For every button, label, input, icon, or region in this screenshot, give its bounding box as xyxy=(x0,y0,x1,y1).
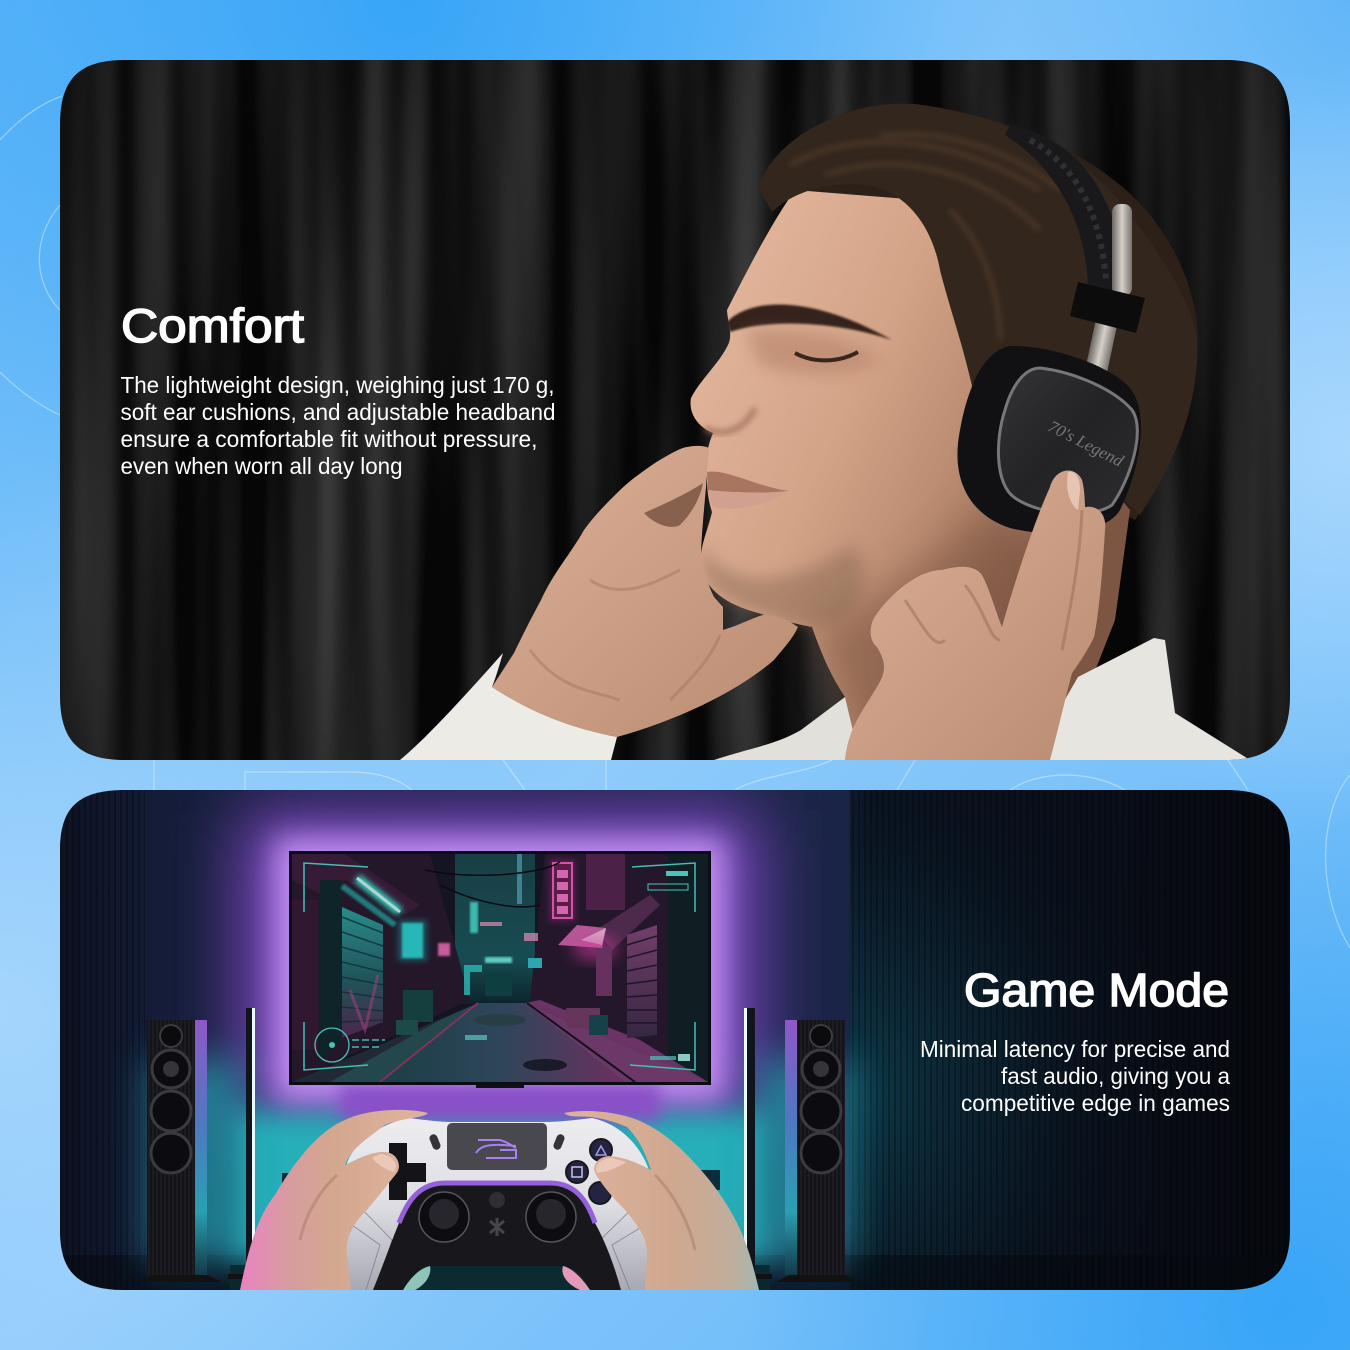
hinge block xyxy=(1070,282,1145,333)
teal neon tube xyxy=(357,878,400,912)
controller dark center xyxy=(373,1183,621,1290)
slider arm xyxy=(1112,204,1132,296)
heading: Game Mode: Game Mode xyxy=(964,964,1229,1016)
barrel xyxy=(589,1015,608,1035)
hair front xyxy=(758,104,1197,515)
left shirt cuff xyxy=(400,653,617,760)
eye socket shadow xyxy=(745,329,880,374)
pink awning xyxy=(558,925,606,948)
right speaker xyxy=(775,1020,860,1282)
face buttons xyxy=(566,1139,612,1204)
room wall xyxy=(60,790,1290,1290)
headband xyxy=(1005,126,1112,290)
right light bar xyxy=(738,1008,772,1279)
pink neon vertical sign xyxy=(553,863,572,918)
left shutter xyxy=(342,907,383,1038)
overhead wires xyxy=(425,862,560,907)
text block: game mode description: competitive edge in games xyxy=(961,1090,1230,1116)
hair back xyxy=(808,104,1198,520)
left shirt collar xyxy=(714,697,860,760)
left hand on controller xyxy=(240,1110,428,1290)
right hand on controller xyxy=(564,1111,759,1290)
HUD xyxy=(304,863,695,1070)
text block: game mode description: Minimal latency for precise and xyxy=(920,1036,1230,1062)
bottom opening with fingers xyxy=(405,1266,590,1290)
eyebrow xyxy=(727,304,892,340)
face and neck xyxy=(691,190,1130,760)
game controller xyxy=(341,1118,660,1290)
dark curtain background xyxy=(60,60,1290,760)
left speaker xyxy=(137,1020,222,1282)
screen dimming xyxy=(292,854,708,1082)
text block: game mode description xyxy=(920,1036,1230,1116)
green dumpster xyxy=(403,990,433,1022)
teal sign xyxy=(402,923,423,958)
text block: game mode description: fast audio, giving you a xyxy=(1001,1063,1230,1089)
sky gap xyxy=(455,854,535,1004)
shoulder menu buttons xyxy=(428,1133,442,1151)
small pink sign xyxy=(438,943,450,956)
ambient purple and teal glow xyxy=(150,810,850,1290)
glowing purple arc xyxy=(399,1183,595,1223)
text block: comfort description: The lightweight design, weighing just 170 g, xyxy=(120,372,554,398)
closed eye xyxy=(795,352,858,360)
panel: game mode xyxy=(60,790,1290,1290)
text block: comfort description: soft ear cushions, and adjustable headband xyxy=(120,399,556,425)
left light bar xyxy=(228,1008,262,1279)
end of alley door xyxy=(485,972,512,996)
d-pad xyxy=(380,1143,426,1200)
small signs xyxy=(485,957,512,963)
stubble shadow xyxy=(702,540,864,627)
heading: Comfort: Comfort xyxy=(121,299,304,352)
lips xyxy=(707,471,790,493)
street and sidewalks xyxy=(292,1003,708,1082)
ear cup xyxy=(957,346,1141,533)
vertical teal sign xyxy=(470,902,478,933)
television xyxy=(289,851,711,1088)
analog sticks xyxy=(419,1192,469,1242)
left building xyxy=(292,854,470,1082)
text block: comfort description: even when worn all day long xyxy=(120,453,402,479)
neon alley game scene xyxy=(292,854,708,1082)
engraved logo text: 70's Legend xyxy=(1045,417,1127,471)
nose shade xyxy=(705,408,755,432)
jaw shadow xyxy=(806,504,1032,729)
touchpad xyxy=(447,1123,547,1170)
text block: comfort description xyxy=(120,372,556,479)
right hand xyxy=(845,470,1105,760)
right shutter xyxy=(627,925,657,1038)
right shirt xyxy=(1050,638,1248,760)
right building xyxy=(530,854,708,1082)
grip line details xyxy=(352,1205,645,1290)
photo: man wearing headphones xyxy=(400,104,1250,760)
console shelf behind controller xyxy=(282,1170,720,1191)
panel: comfort xyxy=(60,60,1290,760)
text block: comfort description: ensure a comfortable fit without pressure, xyxy=(120,426,538,452)
left hand xyxy=(492,446,798,737)
